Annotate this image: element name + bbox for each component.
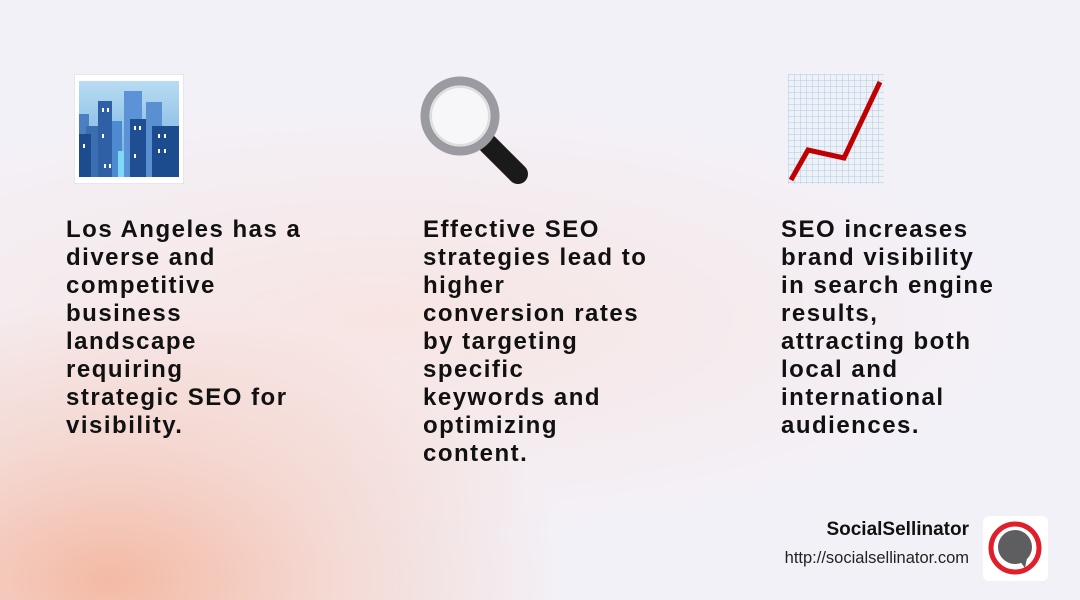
text: column 1: business xyxy=(66,300,182,327)
text: column 1: Los Angeles has a xyxy=(66,216,301,243)
text: column 2: Effective SEO xyxy=(423,216,600,243)
icon: rising chart xyxy=(788,74,884,184)
text: column 1: landscape xyxy=(66,328,197,355)
text: column 3: in search engine xyxy=(781,272,994,299)
text: column 2 xyxy=(423,216,647,467)
text: column 3: SEO increases xyxy=(781,216,969,243)
text: column 1 xyxy=(66,216,301,439)
text: column 2: by targeting xyxy=(423,328,578,355)
icon: magnifying glass xyxy=(420,76,528,184)
logo xyxy=(983,516,1048,581)
text: column 2: content. xyxy=(423,440,528,467)
text: column 2: specific xyxy=(423,356,524,383)
text: column 3: audiences. xyxy=(781,412,920,439)
text: column 3: results, xyxy=(781,300,878,327)
text: column 1: visibility. xyxy=(66,412,183,439)
text: column 3 xyxy=(781,216,994,439)
text: column 1: competitive xyxy=(66,272,216,299)
icon: cityscape xyxy=(74,74,184,184)
text: column 1: diverse and xyxy=(66,244,216,271)
text: column 1: strategic SEO for xyxy=(66,384,288,411)
text: column 2: strategies lead to xyxy=(423,244,647,271)
text: column 3: local and xyxy=(781,356,899,383)
text: column 2: conversion rates xyxy=(423,300,639,327)
brand url: http://socialsellinator.com xyxy=(785,549,969,567)
brand name: SocialSellinator xyxy=(826,519,969,540)
text: column 3: international xyxy=(781,384,945,411)
text: column 3: brand visibility xyxy=(781,244,974,271)
text: column 2: optimizing xyxy=(423,412,558,439)
text: column 1: requiring xyxy=(66,356,184,383)
text: column 2: keywords and xyxy=(423,384,601,411)
text: column 3: attracting both xyxy=(781,328,972,355)
text: column 2: higher xyxy=(423,272,505,299)
